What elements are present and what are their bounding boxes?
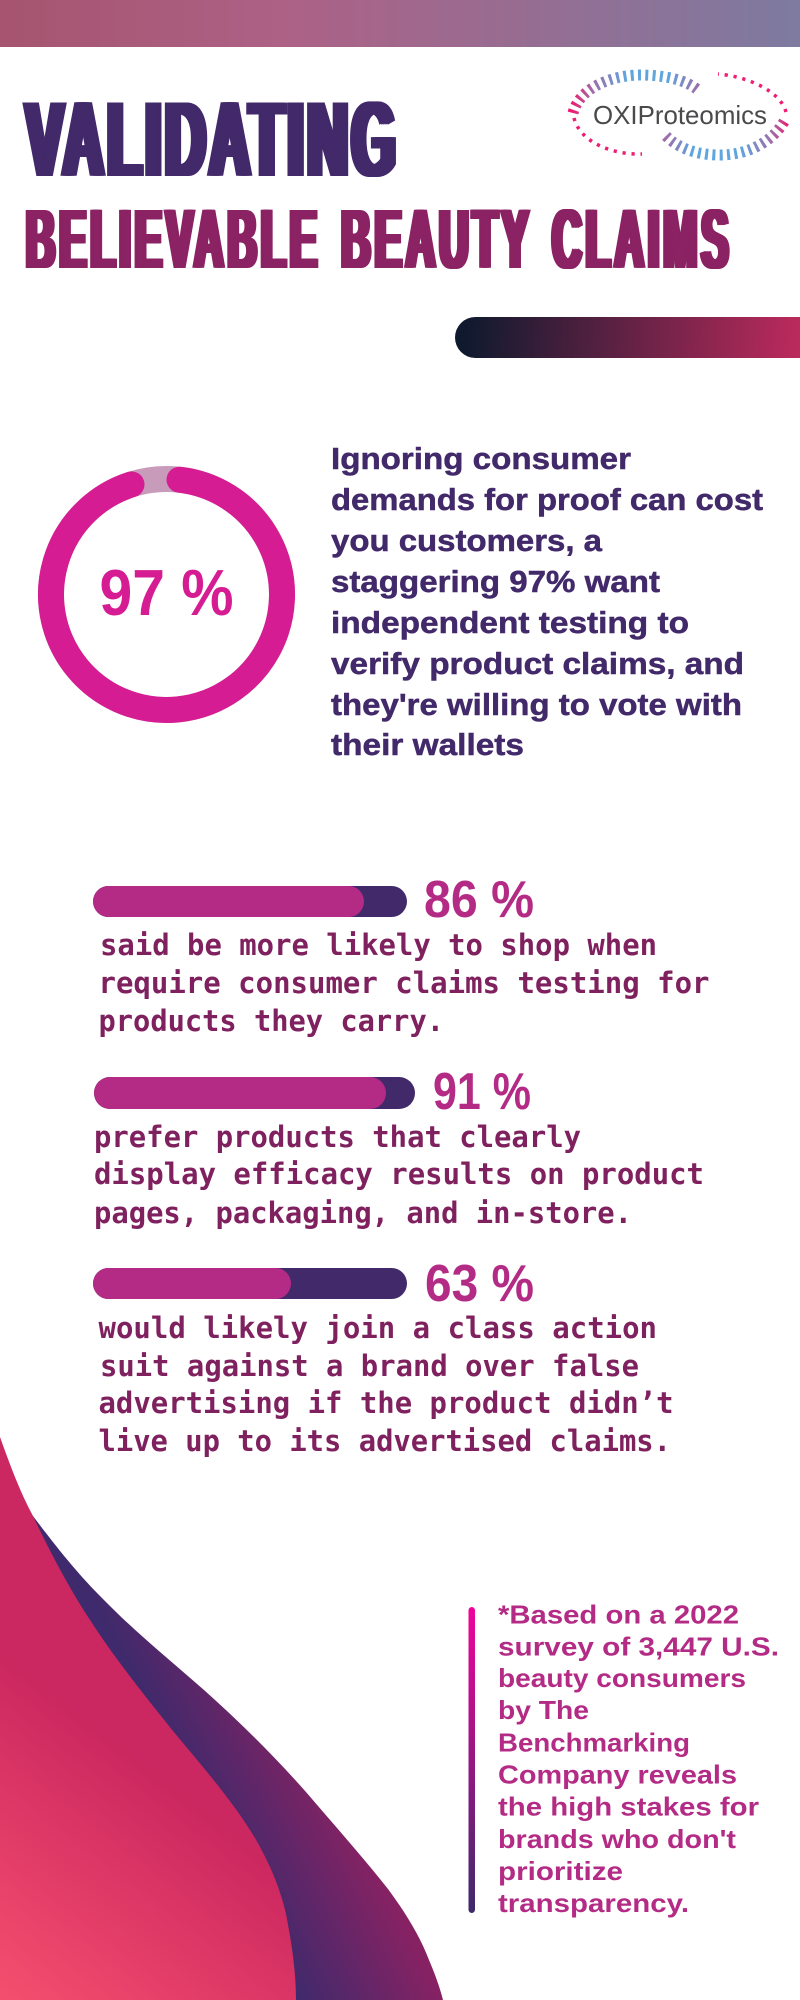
footnote: survey source: brands who don't [498,1824,736,1854]
footnote: survey source: Company reveals [498,1760,737,1790]
text: 91 % description [94,1120,704,1230]
number: 86 %: 86 % [424,871,534,929]
bar chart: 86 % [93,886,407,917]
decorative wave: pink [0,1437,296,2000]
decorative wave: purple [0,1516,443,2000]
text: 91 % description: pages, packaging, and in-store. [94,1196,632,1230]
text: 91 % description: prefer products that clearly [94,1120,581,1154]
donut chart: 97 %: 97 % [100,556,234,629]
decorative gradient pill [455,317,800,358]
text: 63 % description: would likely join a class action [98,1311,657,1345]
top gradient band [0,0,800,47]
title: BELIEVABLE BEAUTY CLAIMS: BELIEVABLE BEAUTY CLAIMS [26,192,732,286]
text: 63 % description [98,1311,674,1458]
text: 63 % description: live up to its advertised claims. [98,1424,671,1458]
footnote: survey source: transparency. [498,1888,689,1918]
donut chart: 97 % [51,479,282,710]
paragraph: consumer demands for proof: independent testing to [331,605,689,640]
text: 63 % description: suit against a brand over false [100,1349,639,1383]
text: 86 % description: require consumer claims testing for [98,966,710,1000]
footnote: survey source [498,1600,779,1918]
paragraph: consumer demands for proof: their wallets [331,727,524,762]
stat: 86 % [93,871,710,1038]
footnote: survey source: the high stakes for [498,1792,759,1822]
text: 86 % description: said be more likely to shop when [100,928,657,962]
footnote: survey source: beauty consumers [498,1663,746,1693]
footnote: survey source: *Based on a 2022 [498,1600,739,1630]
stat: 91 % [94,1063,704,1230]
paragraph: consumer demands for proof [331,441,763,762]
paragraph: consumer demands for proof: Ignoring consumer [331,441,631,476]
paragraph: consumer demands for proof: you customers, a [331,523,603,558]
footnote: survey source: prioritize [498,1856,623,1886]
logo: OXIProteomics [573,74,786,155]
paragraph: consumer demands for proof: staggering 97% want [331,564,660,599]
number: 91 %: 91 % [433,1063,531,1121]
bar chart: 63 % [93,1268,407,1299]
footnote: survey source: by The [498,1695,589,1725]
footnote accent bar [468,1607,475,1913]
logo: OXIProteomics: OXIProteomics [593,100,767,130]
text: 86 % description [98,928,710,1038]
footnote: survey source: Benchmarking [498,1728,690,1758]
footnote: survey source: survey of 3,447 U.S. [498,1632,779,1662]
text: 91 % description: display efficacy results on product [94,1157,704,1191]
paragraph: consumer demands for proof: verify product claims, and [331,646,744,681]
paragraph: consumer demands for proof: they're willing to vote with [331,687,742,722]
number: 63 %: 63 % [425,1255,534,1313]
text: 86 % description: products they carry. [98,1004,444,1038]
bar chart: 91 % [94,1077,415,1109]
stat: 63 % [93,1255,674,1458]
title: VALIDATING: VALIDATING [26,79,400,199]
paragraph: consumer demands for proof: demands for proof can cost [331,482,763,517]
text: 63 % description: advertising if the product didn’t [98,1386,674,1420]
